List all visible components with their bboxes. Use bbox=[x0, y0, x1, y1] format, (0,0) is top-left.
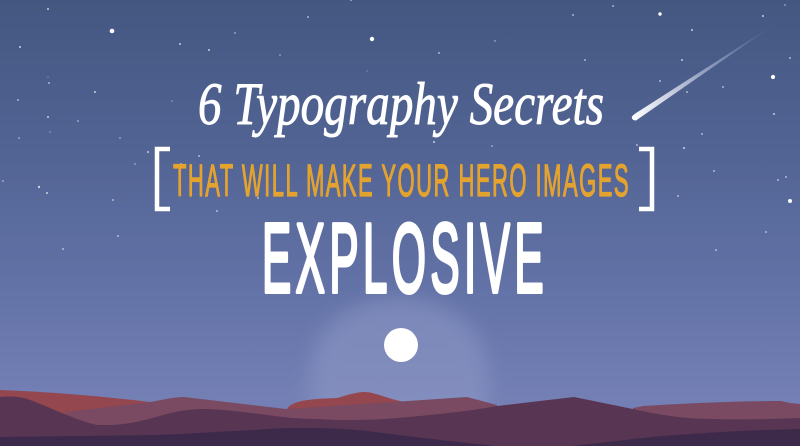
shooting star bbox=[632, 22, 778, 120]
back red ridges bbox=[0, 390, 170, 446]
moon bbox=[384, 328, 418, 362]
darkest foreground ridge bbox=[0, 428, 800, 446]
plum foreground ridge bbox=[0, 396, 800, 446]
mauve ridges bbox=[66, 397, 497, 446]
stars bbox=[2, 0, 792, 251]
right bracket bbox=[639, 149, 652, 209]
mountains bbox=[0, 390, 800, 446]
title: 6 Typography Secrets: 6 Typography Secrets bbox=[198, 71, 604, 137]
left bracket bbox=[157, 149, 170, 209]
moon glow bbox=[310, 298, 488, 420]
